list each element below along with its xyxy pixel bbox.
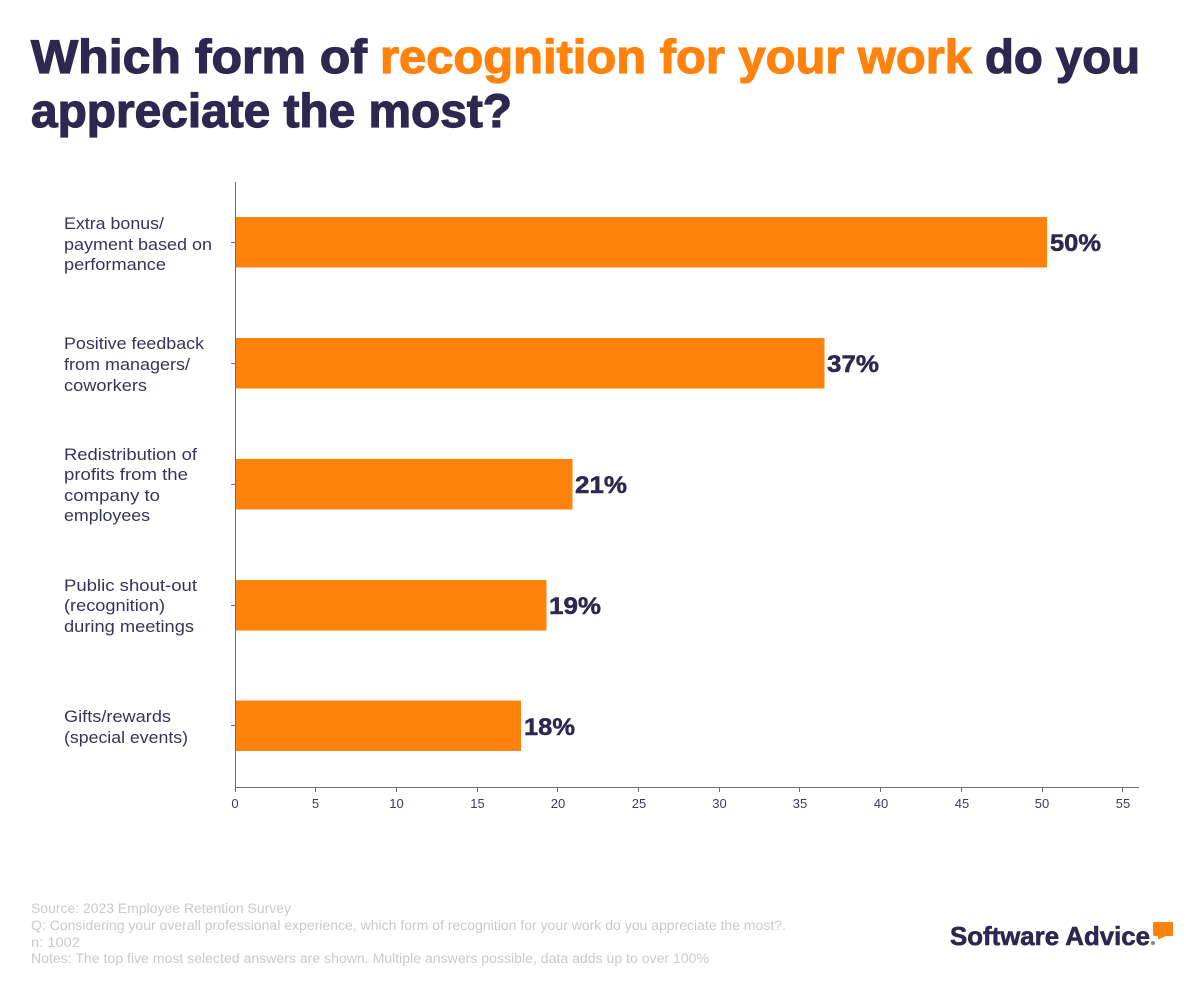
bars: [236, 217, 1047, 751]
source notes: Source: 2023 Employee Retention Survey: [31, 901, 291, 916]
category labels: Positive feedback: [64, 335, 205, 353]
x axis labels: 20: [551, 796, 565, 811]
logo: Software Advice: Software Advice: [950, 921, 1150, 951]
x axis labels: [231, 796, 1130, 811]
bar chart: [64, 182, 1139, 811]
title: do you: [985, 30, 1140, 83]
category labels: during meetings: [64, 618, 194, 636]
category labels: (recognition): [64, 597, 165, 615]
source notes: Notes: The top five most selected answers are shown. Multiple answers possible, data adds up to over 100%: [31, 951, 709, 966]
category labels: (special events): [64, 729, 188, 747]
category labels: coworkers: [64, 377, 147, 395]
x axis labels: 40: [874, 796, 888, 811]
title: appreciate the most?: [31, 84, 512, 137]
title: [31, 30, 1140, 137]
category labels: Redistribution of: [64, 446, 197, 464]
category labels: payment based on: [64, 236, 212, 254]
category labels: from managers/: [64, 356, 190, 374]
title: Which form of: [31, 30, 367, 83]
category labels: Public shout-out: [64, 577, 197, 595]
value labels: 50%: [1050, 230, 1101, 257]
category labels: [64, 215, 212, 747]
x axis labels: 25: [632, 796, 646, 811]
source notes: n: 1002: [31, 935, 80, 950]
category labels: employees: [64, 507, 150, 525]
value labels: 18%: [524, 714, 575, 741]
value labels: 21%: [575, 472, 627, 499]
category labels: performance: [64, 256, 166, 274]
value labels: [524, 230, 1101, 741]
x axis labels: 50: [1035, 796, 1049, 811]
x axis labels: 15: [470, 796, 485, 811]
x axis labels: 30: [712, 796, 727, 811]
x axis labels: 35: [793, 796, 807, 811]
icon: speech bubble: [1153, 922, 1173, 940]
source notes: [31, 901, 786, 966]
x axis labels: 0: [231, 796, 239, 811]
value labels: 37%: [827, 351, 879, 378]
category labels: company to: [64, 487, 160, 505]
source notes: Q: Considering your overall professional experience, which form of recognition for your work do you appreciate the most?.: [31, 918, 786, 933]
title: recognition for your work: [380, 30, 973, 83]
category labels: Gifts/rewards: [64, 708, 171, 726]
value labels: 19%: [549, 593, 601, 620]
x axis labels: 45: [955, 796, 969, 811]
category labels: profits from the: [64, 466, 188, 484]
x axis labels: 55: [1116, 796, 1130, 811]
axes: [231, 182, 1139, 792]
x axis labels: 5: [312, 796, 319, 811]
x axis labels: 10: [389, 796, 404, 811]
category labels: Extra bonus/: [64, 215, 164, 233]
